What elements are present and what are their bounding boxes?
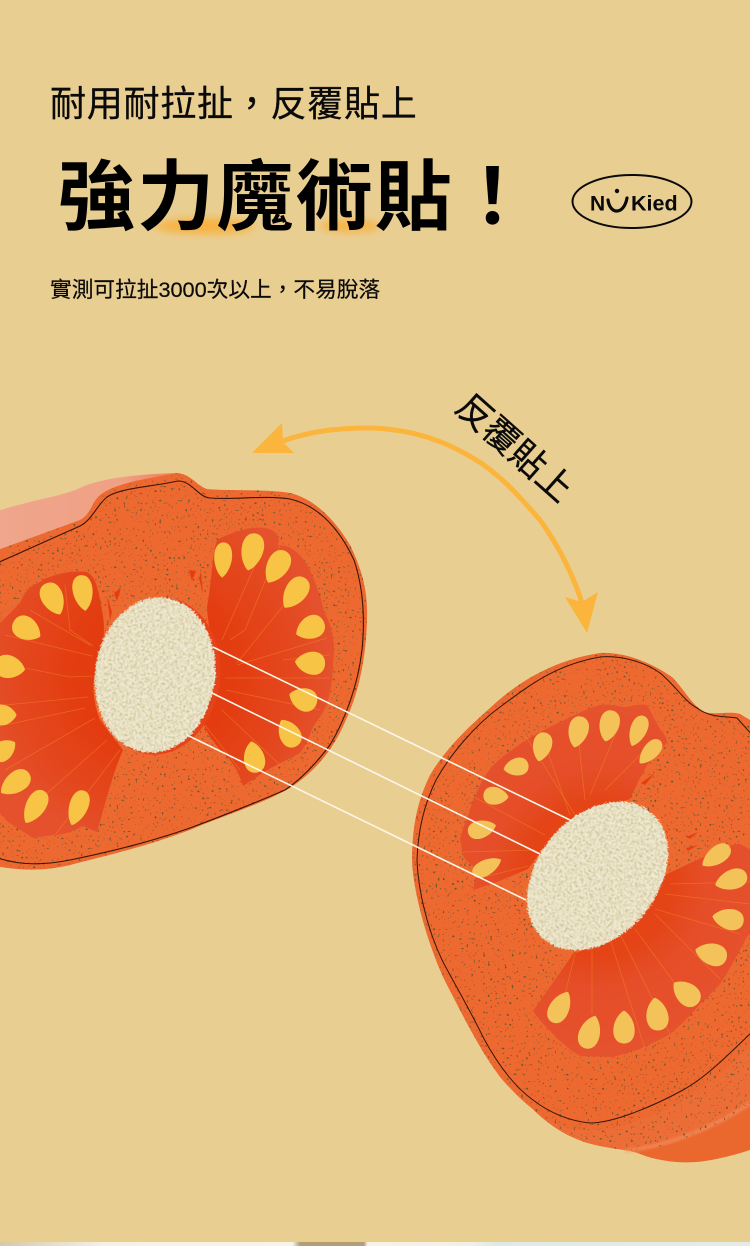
title: main heading: 強力魔術貼！ [58, 136, 533, 247]
logo: NUKied [572, 175, 692, 228]
left slice: right flesh wedge [203, 528, 334, 786]
left slice: pad rim [86, 589, 230, 763]
right slice: speckle [405, 645, 750, 1140]
right slice: lower side band [520, 1030, 750, 1162]
left slice: left flesh wedge [0, 572, 123, 838]
left slice: pink outer side [0, 473, 178, 556]
right slice: side highlight [625, 1100, 750, 1151]
right slice: flecks [641, 773, 698, 851]
left slice: flecks [107, 570, 203, 620]
right slice: seeds [466, 708, 750, 1052]
right tomato slice [405, 645, 750, 1165]
right slice: black contour [417, 657, 750, 1123]
right slice: upper flesh wedge [460, 704, 667, 890]
right slice: upper side band [520, 1030, 750, 1150]
subtitle: 實測可拉扯3000次以上，不易脫落 [50, 277, 380, 302]
left tomato slice [0, 465, 375, 875]
right slice: side speckle [545, 1050, 750, 1150]
bottom strip: next section edge [0, 1242, 750, 1246]
left slice: velcro pad [85, 589, 225, 761]
logo: NUKied: Kied [631, 192, 678, 216]
arrow label: 反覆貼上 [446, 380, 586, 512]
left slice: black contour [0, 481, 363, 864]
right slice: flesh rays [463, 730, 750, 1049]
right slice: cut face [412, 653, 750, 1130]
left slice: speckle [0, 465, 375, 875]
logo: NUKied: N [590, 192, 605, 216]
title: first line: 耐用耐拉扯，反覆貼上 [50, 75, 418, 127]
left slice: flesh rays [5, 545, 330, 835]
right slice: lower flesh wedge [533, 844, 750, 1057]
left slice: cut face [0, 473, 367, 870]
arrow: curved double-headed [252, 423, 598, 633]
connecting lines between pads [187, 647, 572, 900]
right slice: velcro pad [498, 774, 697, 978]
left slice: seeds [0, 531, 329, 828]
highlight under title [155, 218, 380, 234]
